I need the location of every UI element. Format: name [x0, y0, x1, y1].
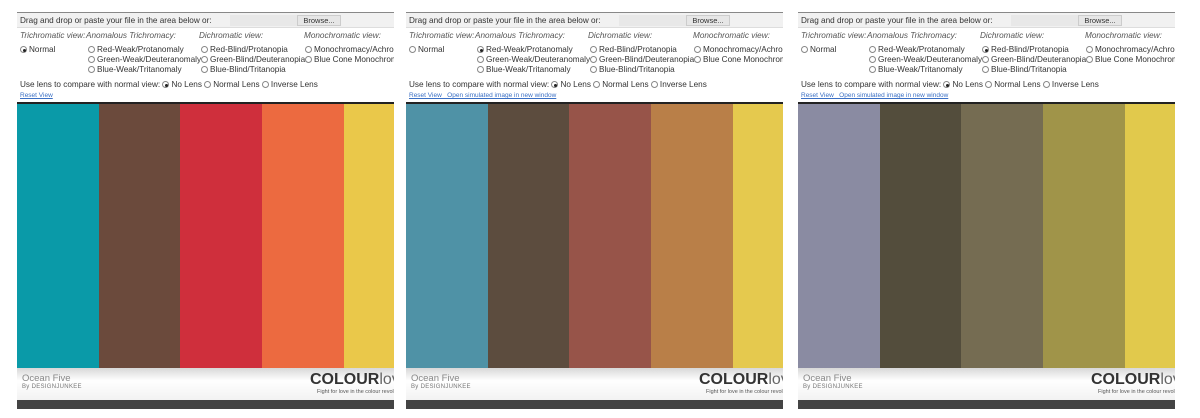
- view options: [20, 31, 394, 99]
- file drop bar: Browse...: [1084, 16, 1116, 25]
- view options: Reset View: [20, 92, 53, 99]
- view options: Green-Weak/Deuteranomaly: [97, 55, 201, 64]
- footer: By DESIGNJUNKEE: [22, 384, 82, 390]
- color swatches: [406, 102, 826, 368]
- view options: Blue-Blind/Tritanopia: [991, 65, 1067, 74]
- file drop bar: Browse...: [303, 16, 335, 25]
- view options: Monochromatic view:: [304, 31, 381, 40]
- view options: Red-Weak/Protanomaly: [97, 45, 184, 54]
- file drop bar: [406, 13, 783, 28]
- view options: Green-Blind/Deuteranopia: [991, 55, 1086, 64]
- view options: Trichromatic view:: [409, 31, 474, 40]
- footer: [798, 368, 1175, 400]
- footer: Ocean Five: [22, 373, 71, 384]
- view options: Reset View Open simulated image in new window: [409, 92, 556, 99]
- view options: Dichromatic view:: [980, 31, 1044, 40]
- view options: Red-Blind/Protanopia: [210, 45, 288, 54]
- view options: Normal: [418, 45, 444, 54]
- file drop bar: Drag and drop or paste your file in the area below or:: [801, 16, 993, 25]
- file drop bar: [17, 13, 394, 28]
- footer: By DESIGNJUNKEE: [411, 384, 471, 390]
- footer: Ocean Five: [803, 373, 852, 384]
- view options: Anomalous Trichromacy:: [867, 31, 957, 40]
- file drop bar: [798, 13, 1175, 28]
- view options: Anomalous Trichromacy:: [475, 31, 565, 40]
- view options: Blue-Blind/Tritanopia: [599, 65, 675, 74]
- view options: Use lens to compare with normal view: No Lens Normal Lens Inverse Lens: [801, 80, 1099, 89]
- file drop bar: Drag and drop or paste your file in the area below or:: [20, 16, 212, 25]
- view options: Dichromatic view:: [199, 31, 263, 40]
- footer: By DESIGNJUNKEE: [803, 384, 863, 390]
- view options: Anomalous Trichromacy:: [86, 31, 176, 40]
- view options: Normal: [810, 45, 836, 54]
- footer: [406, 368, 783, 400]
- view options: Red-Weak/Protanomaly: [486, 45, 573, 54]
- view options: Red-Weak/Protanomaly: [878, 45, 965, 54]
- view options: Trichromatic view:: [801, 31, 866, 40]
- view options: Green-Blind/Deuteranopia: [599, 55, 694, 64]
- panel: protanopia view: [798, 12, 1175, 409]
- color swatches: [17, 102, 437, 368]
- view options: Blue-Weak/Tritanomaly: [878, 65, 963, 74]
- view options: Red-Blind/Protanopia: [991, 45, 1069, 54]
- file drop bar: Drag and drop or paste your file in the area below or:: [409, 16, 601, 25]
- view options: Monochromatic view:: [693, 31, 770, 40]
- view options: [409, 31, 783, 99]
- view options: Dichromatic view:: [588, 31, 652, 40]
- footer: [17, 368, 394, 400]
- view options: Reset View Open simulated image in new window: [801, 92, 948, 99]
- view options: Trichromatic view:: [20, 31, 85, 40]
- color swatches: [798, 102, 1200, 368]
- view options: Blue-Weak/Tritanomaly: [97, 65, 182, 74]
- panel: normal view: [17, 12, 394, 409]
- view options: Green-Blind/Deuteranopia: [210, 55, 305, 64]
- view options: Monochromatic view:: [1085, 31, 1162, 40]
- view options: Normal: [29, 45, 55, 54]
- view options: Blue-Blind/Tritanopia: [210, 65, 286, 74]
- view options: Green-Weak/Deuteranomaly: [486, 55, 590, 64]
- panel: protanomaly view: [406, 12, 783, 409]
- view options: Blue-Weak/Tritanomaly: [486, 65, 571, 74]
- file drop bar: Browse...: [692, 16, 724, 25]
- view options: Use lens to compare with normal view: No Lens Normal Lens Inverse Lens: [20, 80, 318, 89]
- view options: Use lens to compare with normal view: No Lens Normal Lens Inverse Lens: [409, 80, 707, 89]
- view options: [801, 31, 1175, 99]
- view options: Green-Weak/Deuteranomaly: [878, 55, 982, 64]
- footer: Ocean Five: [411, 373, 460, 384]
- view options: Red-Blind/Protanopia: [599, 45, 677, 54]
